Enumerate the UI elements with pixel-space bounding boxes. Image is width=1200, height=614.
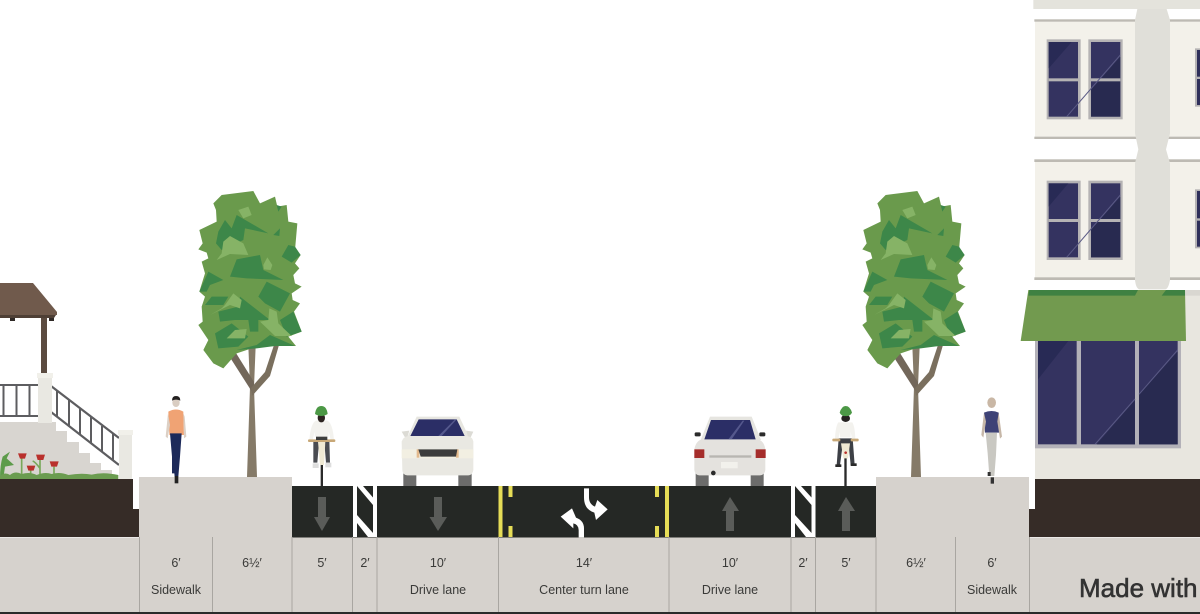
road surface xyxy=(292,486,876,538)
porch roof xyxy=(0,283,57,321)
right sidewalk width: 6′ xyxy=(987,556,997,570)
center lane name: Center turn lane xyxy=(539,583,629,597)
right bike lane arrow xyxy=(838,497,855,531)
lower right window xyxy=(1067,181,1123,260)
porch railing xyxy=(0,385,119,465)
made with credit: Made with xyxy=(1079,573,1198,603)
left drive lane arrow xyxy=(430,497,447,531)
right yellow lines xyxy=(655,486,669,537)
left tree xyxy=(198,191,302,477)
right buffer stripes xyxy=(791,486,816,537)
front stairs xyxy=(0,422,112,479)
porch post xyxy=(41,318,47,374)
railing piers xyxy=(37,373,133,479)
ground soil right xyxy=(1029,479,1200,537)
right sidewalk name: Sidewalk xyxy=(967,583,1018,597)
lower far window xyxy=(1195,189,1200,248)
porch house xyxy=(0,283,133,479)
right buffer width: 2′ xyxy=(798,556,808,570)
right drive lane width: 10′ xyxy=(722,556,739,570)
upper left window xyxy=(1047,39,1081,119)
trunk xyxy=(224,338,279,477)
left buffer width: 2′ xyxy=(360,556,370,570)
upper right window xyxy=(1067,39,1123,119)
left pedestrian xyxy=(166,396,186,483)
left sidewalk width label: 6′ xyxy=(171,556,181,570)
canopy xyxy=(198,191,302,368)
left drive lane name: Drive lane xyxy=(410,583,466,597)
segment dividers xyxy=(140,537,1030,612)
column xyxy=(1135,9,1170,289)
center lane width: 14′ xyxy=(576,556,593,570)
right tree xyxy=(862,191,966,477)
right drive lane arrow xyxy=(722,497,739,531)
awning xyxy=(1021,290,1186,341)
left sidewalk xyxy=(139,477,292,612)
center turn lane markings xyxy=(498,486,669,537)
right planting width: 6½′ xyxy=(906,556,927,570)
right drive lane name: Drive lane xyxy=(702,583,758,597)
left sidewalk name: Sidewalk xyxy=(151,583,202,597)
bottom edge xyxy=(0,612,1200,614)
upper far window xyxy=(1195,48,1200,107)
storefront window xyxy=(1035,341,1181,448)
building xyxy=(1021,0,1200,480)
left bike lane width: 5′ xyxy=(317,556,327,570)
left buffer stripes xyxy=(353,486,377,537)
garden plants xyxy=(0,452,118,479)
base band xyxy=(0,538,1200,612)
left car xyxy=(402,417,473,486)
turn arrows xyxy=(561,488,608,537)
lower left window xyxy=(1047,181,1081,260)
left bike lane arrow xyxy=(314,497,330,531)
left planting width: 6½′ xyxy=(242,556,263,570)
right cyclist xyxy=(832,406,859,486)
left yellow lines xyxy=(498,486,512,537)
left cyclist xyxy=(308,406,335,486)
right bike lane width: 5′ xyxy=(841,556,851,570)
ground soil left xyxy=(0,479,139,537)
right sidewalk xyxy=(876,477,1029,612)
right car xyxy=(694,417,766,486)
left drive lane width: 10′ xyxy=(430,556,447,570)
right pedestrian xyxy=(981,397,1002,484)
